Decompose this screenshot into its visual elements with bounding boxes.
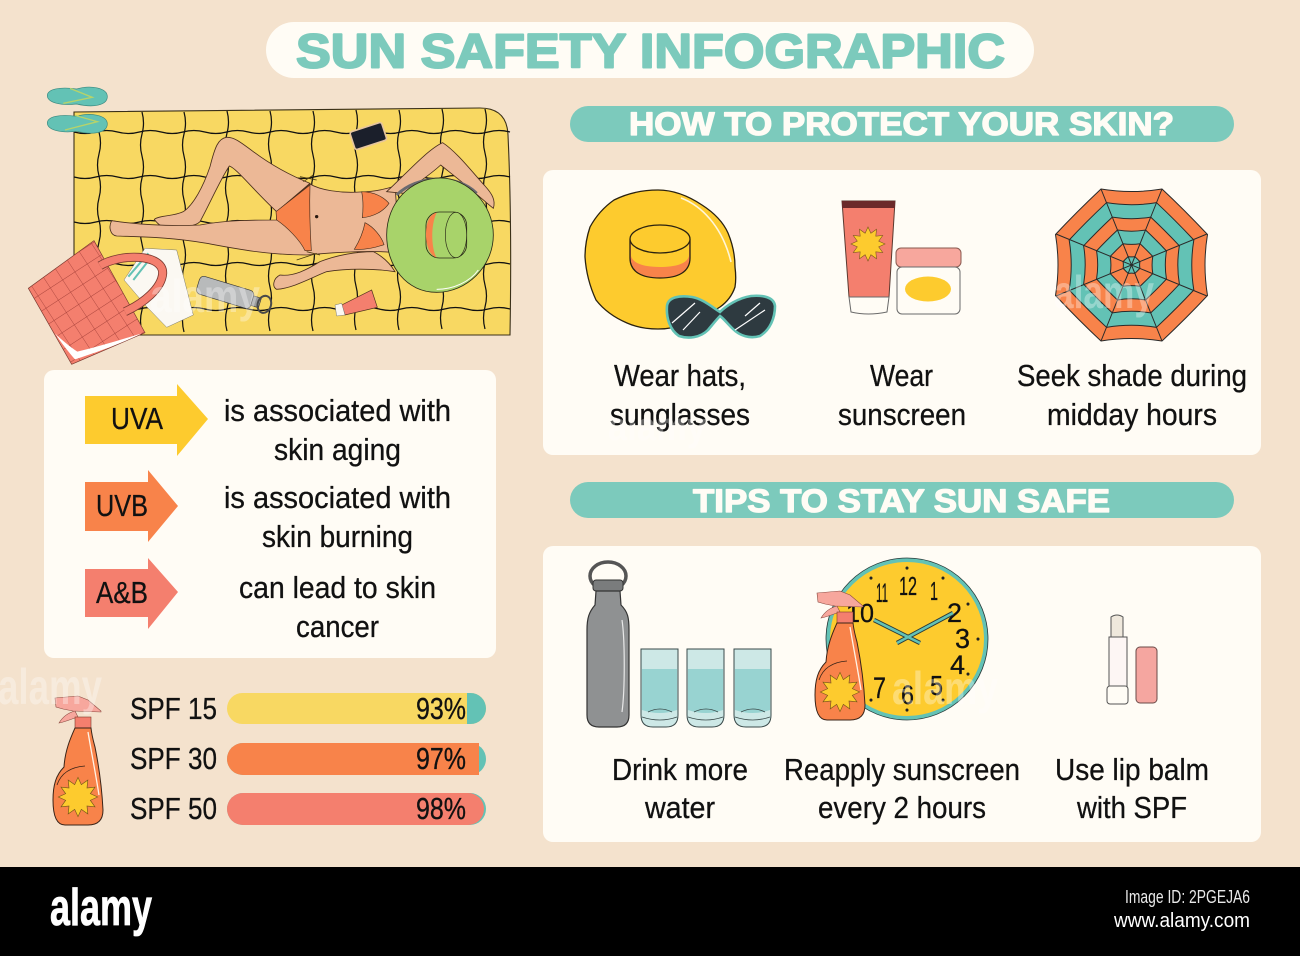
bag handle and highlight bbox=[55, 257, 163, 359]
icon: sunscreen spray bbox=[815, 591, 865, 720]
label: sunscreen: sunscreen bbox=[838, 397, 966, 432]
heading: tips to stay sun safe bbox=[570, 482, 1234, 519]
label: seek shade: Seek shade during bbox=[1017, 358, 1247, 393]
illustration: woman sunbathing on towel bbox=[28, 87, 511, 364]
label: hats and sunglasses: Wear hats, bbox=[614, 358, 746, 393]
flip flops bbox=[47, 87, 107, 133]
UVA description: skin aging bbox=[274, 432, 401, 467]
UVB description bbox=[224, 480, 451, 554]
SPF 50 bar bbox=[130, 791, 486, 826]
watermarks bbox=[0, 266, 1154, 715]
A and B description: cancer bbox=[296, 609, 379, 644]
icon: sunscreen tube and jar bbox=[842, 201, 961, 314]
raised arm bbox=[387, 143, 494, 208]
icon: wall clock: 11 bbox=[876, 578, 888, 608]
heading: how to protect your skin: HOW TO PROTECT YOUR SKIN? bbox=[629, 106, 1174, 142]
icon: wall clock: 12 bbox=[899, 571, 917, 601]
watermarks: alamy bbox=[1054, 266, 1154, 318]
UVA arrow bbox=[85, 384, 208, 456]
SPF 30 bar bbox=[130, 741, 486, 776]
water bottle bbox=[195, 275, 273, 315]
book and towel bbox=[124, 248, 193, 327]
label: reapply sunscreen: every 2 hours bbox=[818, 790, 986, 825]
phone bbox=[350, 122, 387, 150]
UVB description: is associated with bbox=[224, 480, 451, 515]
SPF protection chart bbox=[53, 691, 486, 826]
footer logo: alamy bbox=[50, 879, 152, 937]
title: SUN SAFETY INFOGRAPHIC bbox=[296, 26, 1005, 78]
label: reapply sunscreen bbox=[784, 752, 1020, 825]
icon: steel bottle bbox=[587, 562, 629, 727]
SPF 15 bar: 93% bbox=[416, 691, 466, 726]
SPF 50 bar: 98% bbox=[416, 791, 466, 826]
icon: lip balm bbox=[1107, 615, 1157, 704]
footer bar bbox=[0, 867, 1300, 956]
sunbathing figure and belongings, drawn in zoomed coordinates bbox=[28, 87, 494, 364]
icon: spray bottle bbox=[53, 696, 103, 825]
label: hats and sunglasses: sunglasses bbox=[610, 397, 750, 432]
label: drink more water: Drink more bbox=[612, 752, 748, 787]
label: drink more water bbox=[612, 752, 748, 825]
icon: wall clock: 6 bbox=[901, 680, 914, 710]
watermarks: alamy bbox=[892, 662, 998, 714]
icon: wall clock: 10 bbox=[846, 598, 874, 628]
panel: protect your skin bbox=[543, 170, 1261, 455]
icon: wall clock: 7 bbox=[873, 672, 886, 705]
UVB arrow: UVB bbox=[96, 488, 148, 523]
label: lip balm bbox=[1055, 752, 1209, 825]
label: sunscreen: Wear bbox=[870, 358, 933, 393]
icon: wall clock bbox=[826, 558, 988, 720]
icon: wall clock: 2 bbox=[947, 598, 962, 628]
UVB arrow bbox=[85, 470, 178, 542]
SPF 15 bar: SPF 15 bbox=[130, 691, 217, 726]
SPF 50 bar: SPF 50 bbox=[130, 791, 217, 826]
panel: sun safe tips bbox=[543, 546, 1261, 842]
UVA description: is associated with bbox=[224, 393, 451, 428]
UVB description: skin burning bbox=[262, 519, 413, 554]
icon: wall clock: 1 bbox=[930, 576, 938, 606]
label: seek shade bbox=[1017, 358, 1247, 432]
label: lip balm: Use lip balm bbox=[1055, 752, 1209, 787]
watermarks: alamy bbox=[150, 270, 260, 322]
bent leg bbox=[154, 137, 310, 228]
label: drink more water: water bbox=[644, 790, 715, 825]
SPF 15 bar bbox=[130, 691, 486, 726]
label: sunscreen bbox=[838, 358, 966, 432]
icon: beach umbrella bbox=[1056, 189, 1208, 341]
UVA arrow: UVA bbox=[111, 401, 163, 436]
label: lip balm: with SPF bbox=[1076, 790, 1187, 825]
panel: UV types bbox=[44, 370, 496, 658]
A and B description: can lead to skin bbox=[239, 570, 436, 605]
icon: wall clock: 3 bbox=[955, 623, 970, 654]
heading: tips to stay sun safe: TIPS TO STAY SUN SAFE bbox=[693, 483, 1110, 519]
green sun hat bbox=[387, 178, 493, 292]
SPF 30 bar: 97% bbox=[416, 741, 466, 776]
straight leg and torso bbox=[110, 184, 400, 255]
label: seek shade: midday hours bbox=[1047, 397, 1217, 432]
A and B arrow: A&B bbox=[96, 575, 148, 610]
icon: glasses of water bbox=[641, 649, 771, 727]
footer url: www.alamy.com bbox=[1113, 910, 1250, 932]
bikini bbox=[276, 175, 389, 260]
watermarks: alamy bbox=[0, 659, 102, 715]
A and B description bbox=[239, 570, 436, 644]
towel bbox=[74, 108, 511, 335]
watermarks: alamy bbox=[608, 405, 707, 449]
lower arm bbox=[274, 252, 395, 289]
footer image id: Image ID: 2PGEJA6 bbox=[1125, 887, 1250, 907]
SPF 30 bar: SPF 30 bbox=[130, 741, 217, 776]
icon: wall clock: 5 bbox=[930, 670, 943, 701]
UVA description bbox=[224, 393, 451, 467]
sunscreen tube bbox=[335, 290, 377, 316]
label: reapply sunscreen: Reapply sunscreen bbox=[784, 752, 1020, 787]
quilted bag bbox=[28, 241, 145, 364]
A and B arrow bbox=[85, 558, 178, 629]
label: hats and sunglasses bbox=[610, 358, 750, 432]
icon: yellow hat and sunglasses bbox=[585, 190, 775, 338]
icon: wall clock: 4 bbox=[950, 650, 965, 680]
